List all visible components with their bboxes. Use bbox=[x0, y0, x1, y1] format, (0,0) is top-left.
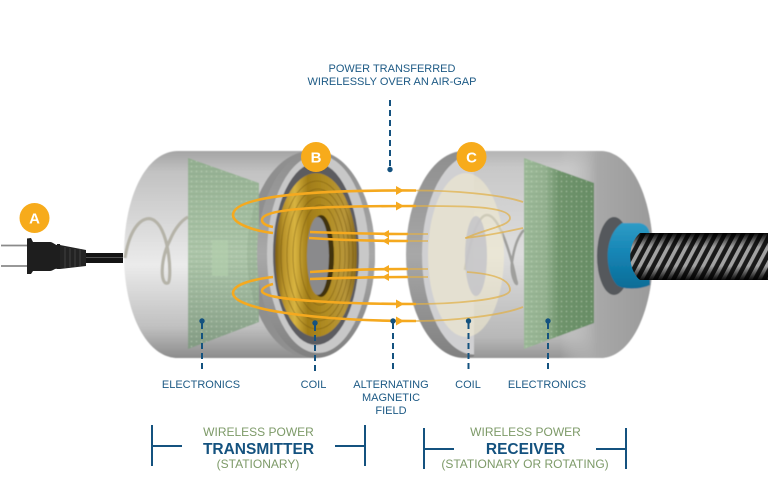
rear ring shell bbox=[247, 151, 375, 358]
label: alternating magnetic field: ALTERNATING bbox=[353, 379, 429, 391]
leader: transmitter coil bbox=[312, 320, 318, 372]
heading: power transferred wirelessly: POWER TRANSFERRED bbox=[329, 63, 456, 75]
badge A bbox=[20, 203, 50, 233]
circuit board bbox=[524, 158, 594, 349]
leader: transmitter electronics bbox=[199, 318, 205, 372]
internal wire bbox=[125, 217, 188, 283]
bracket: transmitter: TRANSMITTER bbox=[203, 441, 314, 458]
magnetic field lines bbox=[233, 186, 416, 326]
bracket: transmitter: (STATIONARY) bbox=[217, 457, 299, 471]
badge C bbox=[456, 142, 486, 172]
badge C: C bbox=[466, 150, 477, 166]
field arrows bbox=[382, 186, 404, 326]
translucent coil bbox=[428, 173, 504, 337]
circuit board bbox=[188, 158, 259, 349]
bracket: transmitter bbox=[152, 425, 365, 471]
heading: power transferred wirelessly: WIRELESSLY OVER AN AIR-GAP bbox=[308, 76, 476, 88]
badge B: B bbox=[311, 150, 322, 166]
label: coil: COIL bbox=[301, 379, 326, 391]
bracket: receiver: WIRELESS POWER bbox=[470, 425, 581, 439]
cable bbox=[630, 233, 768, 280]
leader: air gap bbox=[387, 100, 393, 172]
leader: receiver coil bbox=[466, 318, 471, 372]
leader: receiver electronics bbox=[545, 318, 551, 372]
faded field lines inside receiver bbox=[408, 190, 523, 321]
bracket: transmitter: WIRELESS POWER bbox=[203, 425, 314, 439]
bracket: receiver: (STATIONARY OR ROTATING) bbox=[441, 457, 609, 471]
power plug bbox=[1, 238, 123, 274]
front ring bbox=[257, 151, 375, 358]
transmitter cylinder bbox=[124, 151, 375, 358]
label: coil: COIL bbox=[455, 379, 481, 391]
label: alternating magnetic field bbox=[353, 379, 429, 417]
badge B bbox=[301, 142, 331, 172]
label: alternating magnetic field: MAGNETIC bbox=[362, 392, 420, 404]
internal wire bbox=[465, 215, 524, 284]
bracket: receiver: RECEIVER bbox=[486, 441, 565, 458]
label: electronics: ELECTRONICS bbox=[162, 379, 240, 391]
heading: power transferred wirelessly bbox=[308, 63, 476, 88]
badge A: A bbox=[29, 210, 40, 228]
gold coil bbox=[275, 173, 357, 337]
label: alternating magnetic field: FIELD bbox=[375, 405, 407, 417]
leader: magnetic field bbox=[390, 318, 396, 372]
front ring bbox=[406, 151, 522, 358]
label: electronics: ELECTRONICS bbox=[508, 379, 586, 391]
receiver cylinder bbox=[406, 151, 653, 358]
bracket: receiver bbox=[424, 425, 626, 471]
cable mount bbox=[597, 217, 650, 295]
